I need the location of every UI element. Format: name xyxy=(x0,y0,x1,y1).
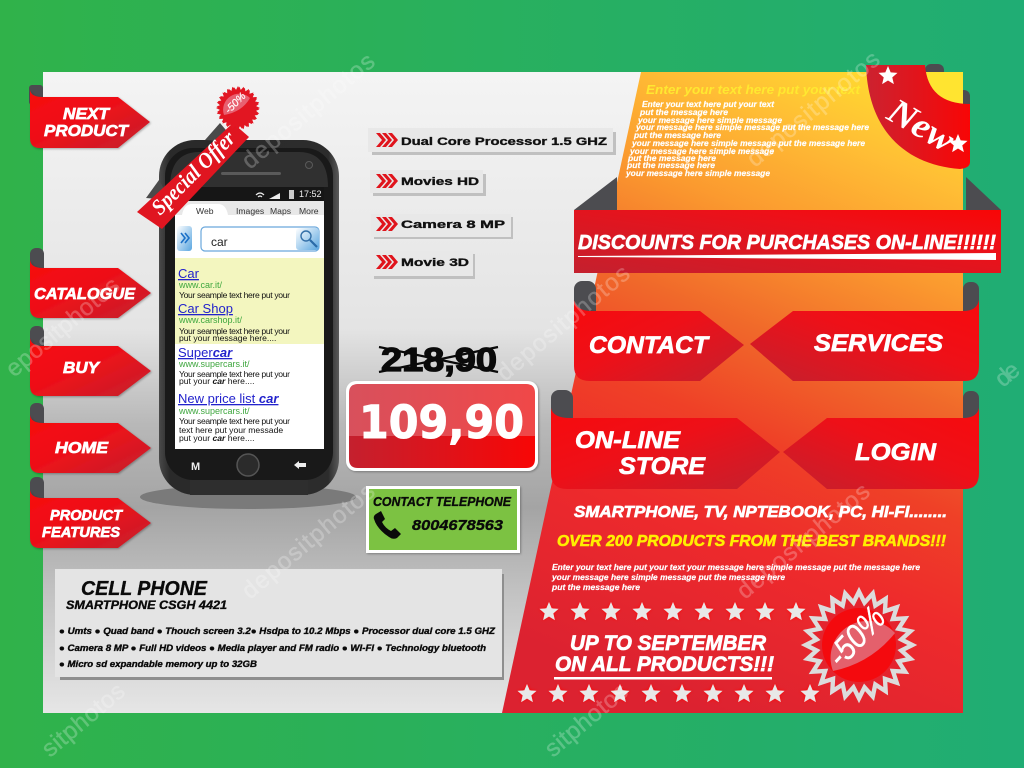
watermarks: depositphotos xyxy=(237,48,380,175)
phone screen: www.supercars.it/ xyxy=(178,359,250,369)
next product ribbon: PRODUCT xyxy=(44,123,130,140)
watermarks: depositphotos xyxy=(732,478,875,605)
contact ribbon: CONTACT xyxy=(589,332,710,359)
discount banner: DISCOUNTS FOR PURCHASES ON-LINE!!!!!! xyxy=(578,231,996,254)
phone screen: www.supercars.it/ xyxy=(178,406,250,416)
new corner ribbon: New xyxy=(880,90,963,160)
panel body text: your message here simple message put the message here xyxy=(631,139,866,148)
brands line: OVER 200 PRODUCTS FROM THE BEST BRANDS!!! xyxy=(557,533,946,550)
buy ribbon xyxy=(30,326,151,396)
phone screen: Images xyxy=(236,206,264,216)
phone buttons: M xyxy=(191,461,200,473)
panel body text: Enter your text here put your text xyxy=(642,100,774,109)
small message text xyxy=(551,563,921,592)
panel body text: put the message here xyxy=(626,161,716,170)
feature: movies hd xyxy=(370,170,486,196)
panel body text: your message here simple message xyxy=(625,169,771,178)
phone screen: Maps xyxy=(270,206,291,216)
services ribbon: SERVICES xyxy=(814,330,943,357)
contact telephone box xyxy=(366,486,520,553)
phone screen: New price list car xyxy=(178,391,279,406)
new price button: 109,90 xyxy=(359,396,524,449)
small message text: Enter your text here put your text your message here simple message put the message here xyxy=(552,563,921,572)
phone screen: text here put your messade xyxy=(179,425,283,435)
panel heading: Enter your text here put your text xyxy=(646,83,861,97)
product features ribbon: PRODUCT xyxy=(50,508,123,524)
product features ribbon: FEATURES xyxy=(42,525,120,541)
phone screen: Web xyxy=(196,206,214,216)
panel body text xyxy=(625,100,870,178)
on-line store ribbon xyxy=(551,390,780,489)
panel body text: put the message here xyxy=(639,108,729,117)
new corner ribbon xyxy=(866,64,970,169)
feature: dual core xyxy=(368,128,616,155)
phone screen: put your message here.... xyxy=(179,333,276,343)
up to september text xyxy=(554,632,774,680)
discount banner xyxy=(574,177,1001,273)
phone screen: car xyxy=(211,235,228,249)
new price button xyxy=(346,381,538,471)
phone screen: Car xyxy=(178,266,200,281)
phone screen: Your seample text here put your xyxy=(179,290,290,300)
phone screen: Supercar xyxy=(178,345,233,360)
buy ribbon: BUY xyxy=(63,360,100,377)
on-line store ribbon: STORE xyxy=(619,453,706,480)
phone screen: www.car.it/ xyxy=(178,280,223,290)
phone screen xyxy=(175,201,324,449)
phone screen: Your seample text here put your xyxy=(179,369,290,379)
phone buttons xyxy=(191,454,306,476)
spec panel: ● Camera 8 MP ● Full HD videos ● Media player and FM radio ● WI-FI ● Technology bluetooth xyxy=(59,643,487,653)
login ribbon xyxy=(783,391,979,489)
old price struck through: 218,90 xyxy=(381,341,497,378)
services ribbon xyxy=(750,282,979,381)
phone screen: Car Shop xyxy=(178,301,233,316)
phone screen: put your car here.... xyxy=(179,376,254,386)
-50% small badge xyxy=(215,85,261,131)
panel body text: put the message here xyxy=(633,131,722,140)
panel body text: your message here simple message put the message here xyxy=(635,123,870,132)
phone screen: www.carshop.it/ xyxy=(178,315,243,325)
-50% small badge: -50% xyxy=(223,90,248,116)
watermarks: depositphotos xyxy=(492,260,635,387)
special offer ribbon: Special Offer xyxy=(146,125,240,220)
gradient panel xyxy=(502,72,963,713)
product categories line: SMARTPHONE, TV, NPTEBOOK, PC, HI-FI........ xyxy=(574,504,947,521)
status bar: 17:52 xyxy=(299,189,322,199)
product features ribbon xyxy=(30,477,151,548)
watermarks: depositphotos xyxy=(742,46,885,173)
feature: movie 3d: Movie 3D xyxy=(401,257,469,269)
upper star row xyxy=(539,602,806,620)
watermarks: depositphotos xyxy=(237,478,380,605)
small message text: your message here simple message put the message here xyxy=(551,573,786,582)
icon: phone handset xyxy=(374,511,401,539)
watermarks: sitphotos xyxy=(37,678,130,763)
panel body text: put the message here xyxy=(627,154,717,163)
phone screen: More xyxy=(299,206,319,216)
spec panel: ● Micro sd expandable memory up to 32GB xyxy=(59,659,258,669)
-50% large burst xyxy=(806,592,912,698)
feature: movies hd: Movies HD xyxy=(401,176,479,188)
feature: camera xyxy=(371,214,513,239)
phone screen: Your seample text here put your xyxy=(179,416,290,426)
spec panel: ● Umts ● Quad band ● Thouch screen 3.2● Hsdpa to 10.2 Mbps ● Processor dual core 1.5 GHZ xyxy=(59,626,496,636)
up to september text: UP TO SEPTEMBER xyxy=(570,632,767,655)
spec panel: CELL PHONE xyxy=(81,578,208,600)
panel body text: your message here simple message xyxy=(629,147,775,156)
lower star row xyxy=(517,684,820,702)
phone screen: Your seample text here put your xyxy=(179,326,290,336)
on-line store ribbon: ON-LINE xyxy=(575,427,681,454)
smartphone xyxy=(159,140,339,495)
spec panel: SMARTPHONE CSGH 4421 xyxy=(66,598,227,612)
feature: movie 3d xyxy=(371,251,475,279)
phone screen: put your car here.... xyxy=(179,433,254,443)
feature: dual core: Dual Core Processor 1.5 GHZ xyxy=(401,136,607,148)
feature: camera: Camera 8 MP xyxy=(401,219,505,231)
phone shadow xyxy=(140,485,356,509)
login ribbon: LOGIN xyxy=(855,439,937,466)
watermarks: epositphotos xyxy=(1,272,125,383)
spec panel xyxy=(55,569,504,680)
-50% large burst: -50% xyxy=(819,599,892,674)
up to september text: ON ALL PRODUCTS!!! xyxy=(555,653,774,676)
small message text: put the message here xyxy=(551,583,641,592)
contact telephone box: 8004678563 xyxy=(412,517,504,534)
watermarks: sitphotos xyxy=(540,678,633,763)
contact ribbon xyxy=(574,281,744,381)
next product ribbon xyxy=(29,85,150,148)
next product ribbon: NEXT xyxy=(63,106,111,123)
status bar xyxy=(256,189,322,199)
panel body text: your message here simple message xyxy=(637,116,783,125)
home ribbon xyxy=(30,403,151,473)
gray card xyxy=(43,72,963,713)
catalogue ribbon xyxy=(30,248,151,318)
home ribbon: HOME xyxy=(55,440,109,457)
catalogue ribbon: CATALOGUE xyxy=(34,286,136,303)
contact telephone box: CONTACT TELEPHONE xyxy=(373,494,511,509)
